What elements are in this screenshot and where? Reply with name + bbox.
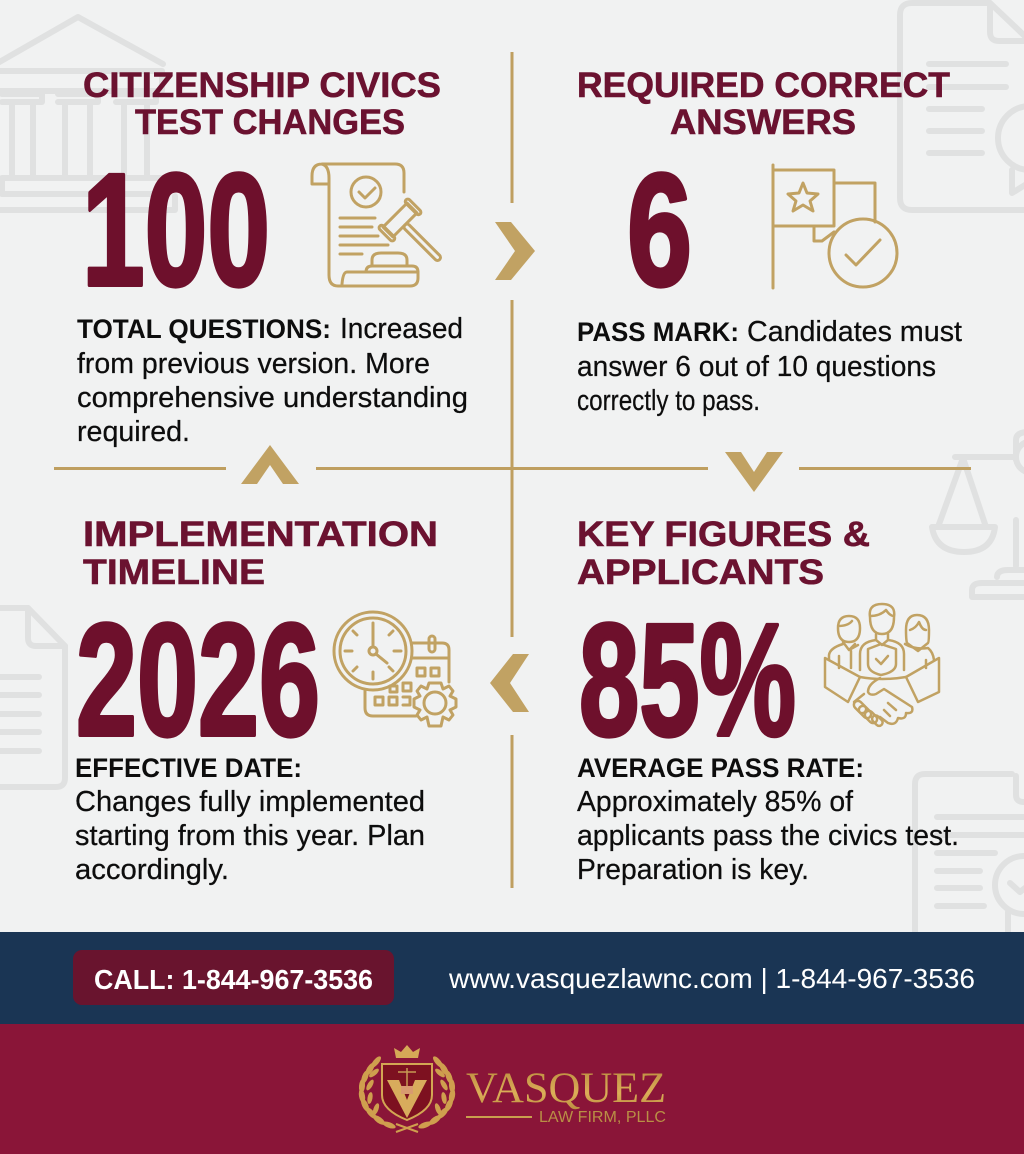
- heading: IMPLEMENTATION: [83, 515, 438, 554]
- icon: clock calendar gear: [334, 612, 456, 726]
- description: Increased: [340, 313, 463, 345]
- panel: required correct answers: [577, 66, 962, 417]
- call button: [73, 950, 394, 1005]
- heading: CITIZENSHIP CIVICS: [83, 66, 441, 105]
- footer band: [0, 1024, 1024, 1154]
- big number 85%: 85%: [579, 590, 796, 769]
- background icon: document with seal top right: [900, 3, 1024, 210]
- website and phone: www.vasquezlawnc.com | 1-844-967-3536: [448, 963, 975, 994]
- logo wordmark: VASQUEZ: [466, 1065, 666, 1112]
- heading: REQUIRED CORRECT: [577, 66, 950, 105]
- heading: [83, 66, 441, 142]
- description: PASS MARK:: [577, 317, 739, 347]
- arrow: up: [241, 445, 299, 484]
- logo wordmark: LAW FIRM, PLLC: [539, 1109, 666, 1126]
- heading: [83, 515, 438, 592]
- description: EFFECTIVE DATE:: [75, 753, 302, 783]
- arrow: left: [490, 654, 529, 712]
- heading: [577, 66, 950, 142]
- description: [577, 753, 959, 886]
- description: Changes fully implemented: [75, 786, 425, 818]
- description: [75, 753, 425, 886]
- description: Candidates must: [747, 316, 962, 348]
- icon: scroll and gavel: [312, 164, 454, 286]
- background icon: document with seal bottom right: [915, 774, 1024, 932]
- heading: KEY FIGURES &: [577, 515, 870, 554]
- description: [577, 316, 962, 417]
- logo emblem: [358, 1045, 456, 1132]
- background icon: scales of justice: [932, 432, 1024, 597]
- description: TOTAL QUESTIONS:: [77, 314, 331, 344]
- description: comprehensive understanding: [77, 382, 468, 414]
- description: required.: [77, 416, 190, 448]
- big number 100: 100: [82, 140, 270, 319]
- icon: people and handshake: [825, 604, 939, 727]
- description: accordingly.: [75, 854, 229, 886]
- panel: citizenship civics test changes: [77, 66, 468, 448]
- laurel wreath: [358, 1055, 456, 1130]
- call button: CALL: 1-844-967-3536: [94, 964, 373, 995]
- icon: flag with check: [773, 165, 897, 288]
- description: correctly to pass.: [577, 385, 760, 417]
- heading: ANSWERS: [670, 103, 856, 142]
- description: Preparation is key.: [577, 854, 809, 886]
- heading: APPLICANTS: [577, 553, 824, 592]
- background icon: courthouse: [0, 17, 175, 210]
- description: applicants pass the civics test.: [577, 820, 959, 852]
- dividers: [54, 52, 971, 888]
- contact bar: [0, 932, 1024, 1024]
- description: AVERAGE PASS RATE:: [577, 753, 864, 783]
- big number 6: 6: [627, 140, 692, 319]
- background icon: document left: [0, 608, 65, 787]
- panel: key figures and applicants: [577, 515, 959, 886]
- heading: TIMELINE: [83, 553, 265, 592]
- description: [77, 313, 468, 448]
- description: answer 6 out of 10 questions: [577, 351, 936, 383]
- arrow: right: [495, 222, 535, 280]
- big number 2026: 2026: [76, 590, 320, 769]
- arrow: down: [725, 452, 783, 492]
- heading: TEST CHANGES: [135, 103, 405, 142]
- description: starting from this year. Plan: [75, 820, 425, 852]
- heading: [577, 515, 870, 592]
- description: from previous version. More: [77, 348, 430, 380]
- panel: implementation timeline: [75, 515, 456, 886]
- description: Approximately 85% of: [577, 786, 854, 818]
